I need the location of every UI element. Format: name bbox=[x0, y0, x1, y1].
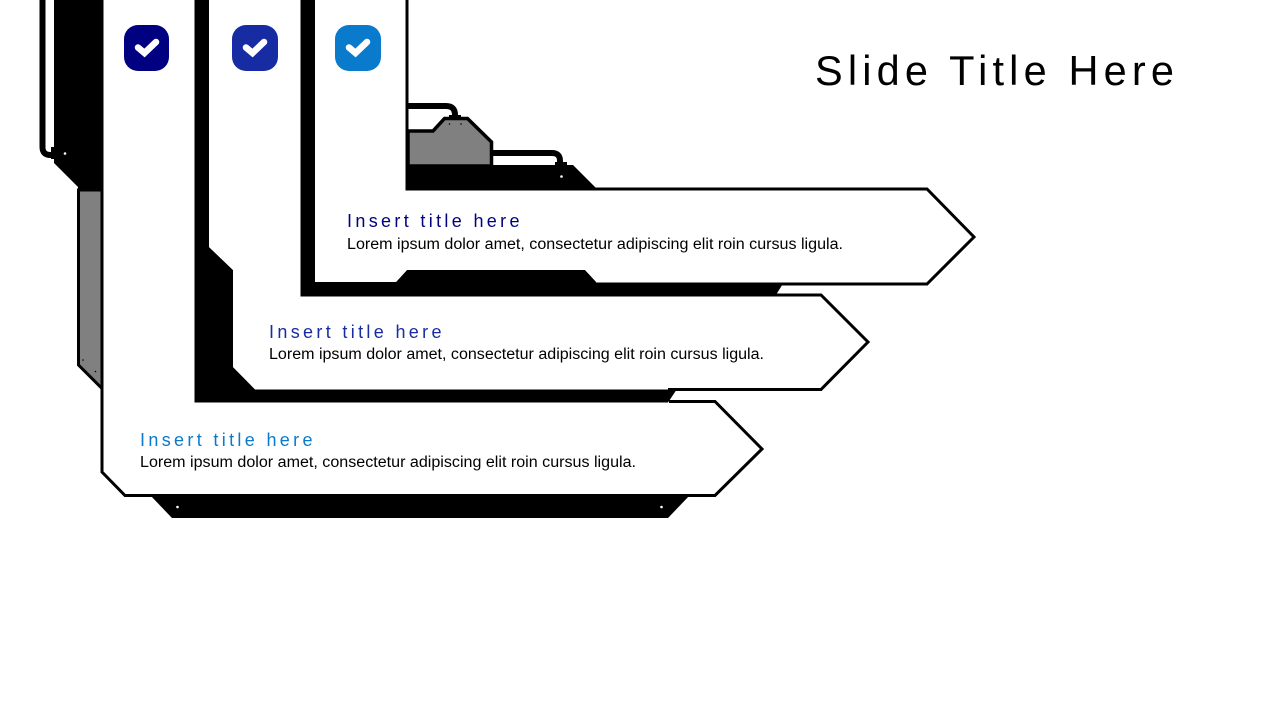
text block: step 2: Insert title here bbox=[269, 322, 442, 342]
panel: step 3 black backing bbox=[300, 0, 784, 296]
text block: step 1 bbox=[140, 430, 636, 471]
text block: step 3 bbox=[347, 211, 843, 253]
slide title: Slide Title Here bbox=[815, 47, 1174, 94]
text block: step 3: Insert title here bbox=[347, 211, 520, 231]
panel: step 2 black backing bbox=[194, 0, 677, 402]
text block: step 1: Lorem ipsum dolor amet, consectetur adipiscing elit roin cursus ligula. bbox=[140, 454, 636, 471]
text block: step 2: Lorem ipsum dolor amet, consectetur adipiscing elit roin cursus ligula. bbox=[269, 346, 764, 363]
icon: check badge light blue bbox=[335, 25, 381, 71]
text block: step 1: Insert title here bbox=[140, 430, 312, 450]
text block: step 3: Lorem ipsum dolor amet, consectetur adipiscing elit roin cursus ligula. bbox=[347, 236, 843, 253]
icon: check badge blue bbox=[232, 25, 278, 71]
text block: step 2 bbox=[269, 322, 764, 363]
panel: step 1 arrow bbox=[102, 0, 762, 496]
icon: check badge navy bbox=[124, 25, 169, 71]
bottom black base bbox=[150, 495, 690, 518]
panel: step 3 arrow bbox=[315, 0, 974, 284]
left back assembly: pipe, black block and grey panel bbox=[42, 0, 104, 388]
step 3 arrow outline bbox=[407, 0, 974, 284]
top back assembly: pipes, grey panel and black block bbox=[406, 106, 597, 189]
step 2 arrow outline bbox=[668, 295, 868, 390]
step 1 arrow outline bbox=[102, 387, 762, 496]
panel: step 2 arrow bbox=[209, 0, 868, 390]
